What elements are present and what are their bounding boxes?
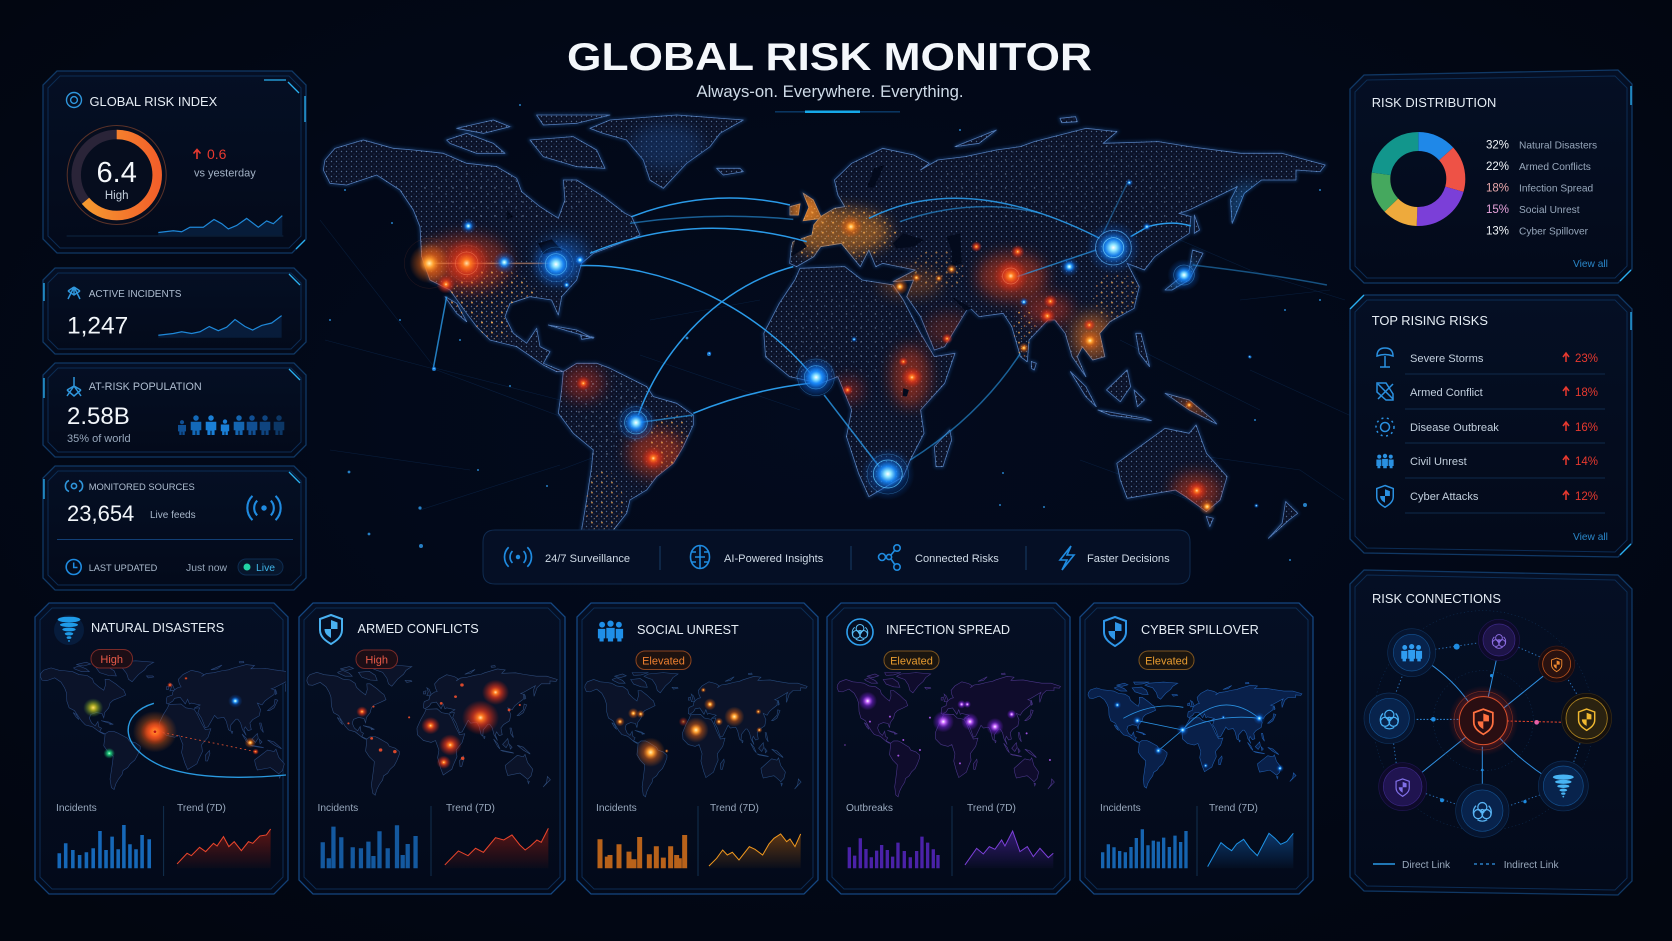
panel: active incidents <box>43 268 306 354</box>
title: GLOBAL RISK MONITOR <box>567 36 1092 79</box>
connection arcs <box>430 183 1327 467</box>
panel: feature bar <box>483 530 1190 584</box>
row dividers <box>1405 374 1605 513</box>
legend: Cyber Spillover <box>1519 226 1589 238</box>
labels <box>596 803 759 876</box>
row: disease outbreak <box>1376 418 1598 436</box>
icon: broadcast <box>247 496 281 520</box>
panel: cyber spillover <box>1080 603 1313 894</box>
labels <box>56 803 226 876</box>
labels: Trend (7D) <box>446 803 495 814</box>
heading: ACTIVE INCIDENTS <box>89 289 182 300</box>
row: armed conflict: 18% <box>1575 387 1598 399</box>
icon: brain <box>690 546 710 568</box>
legend: 18% <box>1486 182 1509 194</box>
bar chart <box>849 837 938 868</box>
row: civil unrest: Civil Unrest <box>1410 456 1467 468</box>
severity badge <box>884 651 939 670</box>
labels: Trend (7D) <box>1209 803 1258 814</box>
icon: shield <box>1104 617 1126 646</box>
gauge: High <box>105 190 129 202</box>
severity badge: Elevated <box>642 656 685 668</box>
panel: risk connections <box>1350 570 1632 895</box>
trend chart <box>177 829 271 868</box>
severity badge <box>91 650 132 668</box>
icon: network <box>68 287 80 299</box>
change vs yesterday: 0.6 <box>207 146 227 162</box>
legend: Armed Conflicts <box>1519 162 1591 173</box>
labels <box>846 803 1016 876</box>
legend: Indirect Link <box>1504 860 1560 871</box>
label: Faster Decisions <box>1087 553 1170 565</box>
bar chart <box>600 835 685 868</box>
inland seas <box>507 165 972 397</box>
subtitle: Always-on. Everywhere. Everything. <box>696 82 964 101</box>
heading: MONITORED SOURCES <box>89 481 195 492</box>
labels <box>318 803 495 876</box>
heading: TOP RISING RISKS <box>1372 313 1488 328</box>
last updated row: LAST UPDATED <box>89 563 158 573</box>
gauge <box>67 126 166 224</box>
row: armed conflict <box>1377 383 1598 400</box>
network diagram <box>1364 611 1612 837</box>
panel: natural disasters <box>35 603 311 894</box>
bar chart <box>323 825 416 868</box>
bar chart <box>59 825 149 868</box>
link: View all <box>1573 532 1608 543</box>
last updated row <box>66 559 283 575</box>
icon: tornado <box>54 615 84 645</box>
map <box>1088 682 1302 788</box>
icon: biohazard <box>847 619 873 645</box>
node: left biohazard <box>1364 693 1415 744</box>
row: disease outbreak: 16% <box>1575 422 1598 434</box>
node: people <box>1388 629 1436 677</box>
bar chart <box>1103 829 1186 868</box>
map <box>307 665 557 795</box>
heading: ARMED CONFLICTS <box>358 622 479 636</box>
legend: 15% <box>1486 204 1509 216</box>
node: orange shield <box>1539 646 1575 682</box>
gauge: 6.4 <box>97 157 137 189</box>
row: civil unrest <box>1376 454 1598 468</box>
row: cyber attacks <box>1377 486 1598 507</box>
people icons <box>178 415 284 435</box>
legend: 22% <box>1486 161 1509 173</box>
legend <box>1373 860 1560 871</box>
node: purple shield <box>1379 763 1427 811</box>
severity badge <box>636 651 691 670</box>
coastline halo <box>323 115 1325 567</box>
label: Connected Risks <box>915 553 999 565</box>
row: cyber attacks: Cyber Attacks <box>1410 491 1479 503</box>
city lights and regional glows <box>324 116 1324 536</box>
panel: infection spread <box>827 603 1070 894</box>
icon: surveillance <box>505 547 531 567</box>
donut chart <box>1381 142 1456 216</box>
scattered network nodes <box>329 104 1321 561</box>
change vs yesterday: vs yesterday <box>194 168 256 180</box>
row: severe storms <box>1377 348 1598 367</box>
title underline <box>775 110 900 113</box>
caption: Live feeds <box>150 510 196 521</box>
node: tornado <box>1538 761 1588 811</box>
sparkline <box>67 216 283 236</box>
heading: RISK DISTRIBUTION <box>1372 95 1496 110</box>
icon: people <box>598 620 623 642</box>
icon: bolt <box>1060 546 1074 570</box>
legend: Natural Disasters <box>1519 140 1597 152</box>
panel: global risk index <box>43 71 306 253</box>
continents <box>323 115 1325 567</box>
severity badge: High <box>365 654 388 666</box>
legend: 13% <box>1486 226 1509 238</box>
trend chart <box>965 831 1053 868</box>
severity badge: Elevated <box>1145 656 1188 668</box>
value: 23,654 <box>67 501 134 526</box>
severity badge: High <box>100 654 123 666</box>
value: 2.58B <box>67 403 130 430</box>
last updated row: Just now <box>186 563 228 574</box>
icon: globe badge <box>66 92 82 108</box>
labels <box>1100 803 1258 876</box>
trend chart <box>445 828 548 868</box>
hotspots <box>404 179 1259 515</box>
node: center shield <box>1448 686 1518 756</box>
heading: NATURAL DISASTERS <box>91 621 224 635</box>
labels: Trend (7D) <box>177 803 226 814</box>
map <box>40 660 286 790</box>
severity badge <box>1139 651 1194 670</box>
labels: Outbreaks <box>846 803 893 814</box>
legend: 32% <box>1486 140 1509 152</box>
legend <box>1486 140 1597 238</box>
icon: network star <box>67 377 81 396</box>
icon: shield <box>320 615 342 644</box>
panel: monitored sources <box>43 466 306 590</box>
heading: RISK CONNECTIONS <box>1372 591 1501 606</box>
legend: Direct Link <box>1402 860 1451 871</box>
trend chart <box>709 834 801 868</box>
heading: CYBER SPILLOVER <box>1141 623 1259 637</box>
node: purple biohazard <box>1478 619 1520 661</box>
heading: GLOBAL RISK INDEX <box>90 94 218 109</box>
row: severe storms: Severe Storms <box>1410 353 1484 365</box>
value: 1,247 <box>67 312 128 340</box>
faint network background <box>320 220 1360 510</box>
labels: Incidents <box>56 803 97 814</box>
caption: 35% of world <box>67 433 131 445</box>
panel: at-risk population <box>43 363 306 457</box>
labels: Trend (7D) <box>710 803 759 814</box>
node: blue biohazard <box>1456 784 1509 837</box>
heading: AT-RISK POPULATION <box>89 381 202 393</box>
map <box>585 673 807 797</box>
row: armed conflict: Armed Conflict <box>1410 387 1483 399</box>
legend: Social Unrest <box>1519 205 1580 216</box>
panel: armed conflicts <box>299 603 565 894</box>
row: disease outbreak: Disease Outbreak <box>1410 422 1499 434</box>
trend chart <box>1208 833 1293 868</box>
row: severe storms: 23% <box>1575 353 1598 365</box>
row: civil unrest: 14% <box>1575 456 1598 468</box>
panel: risk distribution <box>1350 70 1632 283</box>
labels: Incidents <box>1100 803 1141 814</box>
world map <box>310 100 1360 570</box>
heading: SOCIAL UNREST <box>637 623 739 637</box>
label: AI-Powered Insights <box>724 553 824 565</box>
map <box>837 673 1061 797</box>
legend: Infection Spread <box>1519 184 1594 194</box>
link: View all <box>1573 259 1608 270</box>
node: yellow shield <box>1562 693 1612 743</box>
icon: connected nodes <box>878 545 900 570</box>
heading: INFECTION SPREAD <box>886 623 1010 637</box>
labels: Trend (7D) <box>967 803 1016 814</box>
last updated row: Live <box>256 563 275 574</box>
panel: social unrest <box>577 603 818 894</box>
severity badge <box>356 650 398 668</box>
icon: sources <box>65 480 83 492</box>
labels: Incidents <box>318 803 358 814</box>
label: 24/7 Surveillance <box>545 553 630 565</box>
row: cyber attacks: 12% <box>1575 491 1598 503</box>
panel: top rising risks <box>1350 295 1632 557</box>
change vs yesterday <box>194 146 256 180</box>
sparkline <box>158 316 282 338</box>
severity badge: Elevated <box>890 656 933 668</box>
labels: Incidents <box>596 803 637 814</box>
